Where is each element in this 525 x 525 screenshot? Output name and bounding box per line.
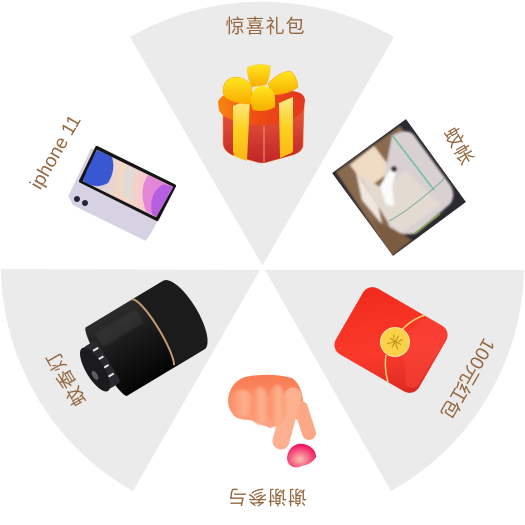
wedge: lower right [265,270,524,491]
palm [228,375,303,428]
gift lid [218,91,305,125]
top textured section [132,273,216,368]
person [380,170,396,206]
label: iphone 11: iphone 11 [26,112,86,193]
warm room [335,125,406,252]
icon: mosquito lamp speaker [66,273,216,408]
label: 蚊帐: 蚊帐 [439,124,478,170]
purple wallpaper [142,175,173,217]
heart [287,444,316,468]
net frame [392,135,434,190]
wedge: lower left [1,269,260,491]
pale wallpaper bands [123,165,136,201]
knob [74,344,116,396]
knob highlight [90,370,100,381]
coin character: 米 [385,332,405,352]
speaker body [81,274,216,399]
lower corner wood [372,220,412,256]
gift body [223,108,304,163]
label: 100元红包: 100元红包 [436,334,499,422]
knob neck [83,340,121,390]
green edge [414,214,440,234]
index finger [281,396,293,441]
knuckles [230,385,286,427]
wedge: top [130,2,394,266]
phone screen [83,150,173,217]
phone frame [81,148,174,219]
warm light [348,144,388,184]
knob teeth [93,348,114,377]
gift bow [223,77,252,104]
label: 蚊香灯: 蚊香灯 [42,347,91,410]
phone back [70,150,172,239]
bed [358,170,440,234]
body sheen [94,309,144,347]
envelope [330,283,452,397]
label: 谢谢参与: 谢谢参与 [227,486,307,508]
photo contents [336,126,453,256]
icon: gift box [218,64,305,163]
blue wallpaper [83,150,113,186]
canopy [380,131,453,234]
gold band [132,296,179,366]
icon: mosquito net photo [332,119,466,256]
headboard [356,172,382,224]
envelope string [385,315,425,382]
coin [380,328,410,356]
icon: iphone 11 [70,148,174,239]
gift ribbons [233,99,250,161]
thumb [301,408,309,433]
label: 惊喜礼包: 惊喜礼包 [225,16,306,38]
phone cameras [74,196,88,206]
icon: red envelope [330,283,452,397]
photo background [332,119,466,256]
envelope flap shading [398,316,447,388]
icon: hand with heart [228,375,316,468]
highlight line [263,126,265,162]
